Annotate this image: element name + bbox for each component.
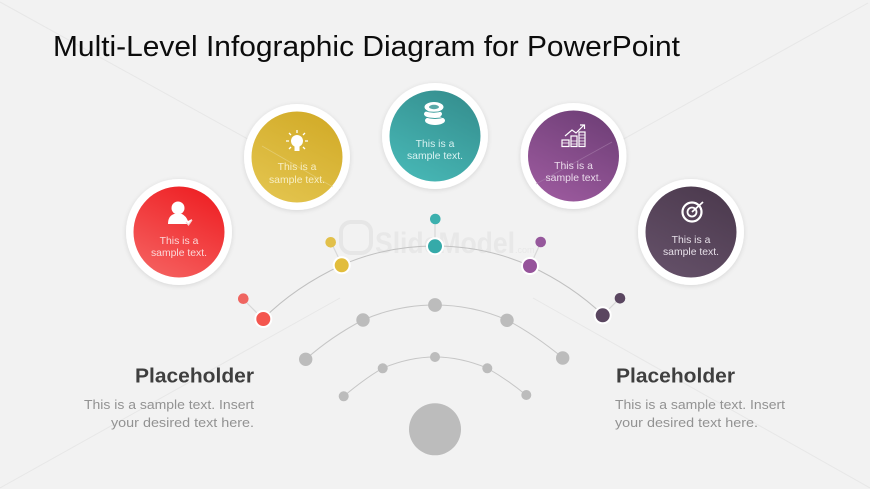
icon: growth chart [562,125,585,146]
badge: red [126,179,232,285]
badge: red: sample text. [151,248,207,259]
base circle [409,403,461,455]
watermark: .com [515,245,535,255]
icon: person [168,202,192,225]
top arc [263,246,603,319]
middle arc nodes [299,298,569,366]
watermark: SlideModel [375,227,515,260]
left text block: Placeholder [135,364,254,388]
right text block [615,364,785,430]
icon: light bulb [286,130,308,151]
right text block: your desired text here. [615,415,758,430]
badge: dark plum [638,179,744,285]
connectors [243,219,620,319]
lower arc nodes [339,352,531,401]
badge: red: This is a [160,236,199,247]
left text block: This is a sample text. Insert [84,397,254,412]
coloured arc nodes [255,238,611,327]
small coloured dots [238,214,625,304]
right text block: Placeholder [616,364,735,388]
badge: dark plum: This is a [672,235,711,246]
badge: dark plum: sample text. [663,247,719,258]
left text block [84,364,254,430]
title: Multi-Level Infographic Diagram for PowerPoint [53,31,680,63]
badge: teal: sample text. [407,151,463,162]
left text block: your desired text here. [111,415,254,430]
badge: purple: This is a [554,161,593,172]
badge: yellow [244,104,350,210]
icon: target [682,202,703,222]
badge: purple: sample text. [545,173,602,184]
lower arc [344,357,526,396]
badge: teal [382,83,488,189]
icon: coins [424,102,445,125]
badge: teal: This is a [416,139,455,150]
right text block: This is a sample text. Insert [615,397,785,412]
badge: yellow: sample text. [269,175,325,186]
middle arc [306,305,563,359]
badge: purple [520,103,626,209]
badge: yellow: This is a [278,162,317,173]
